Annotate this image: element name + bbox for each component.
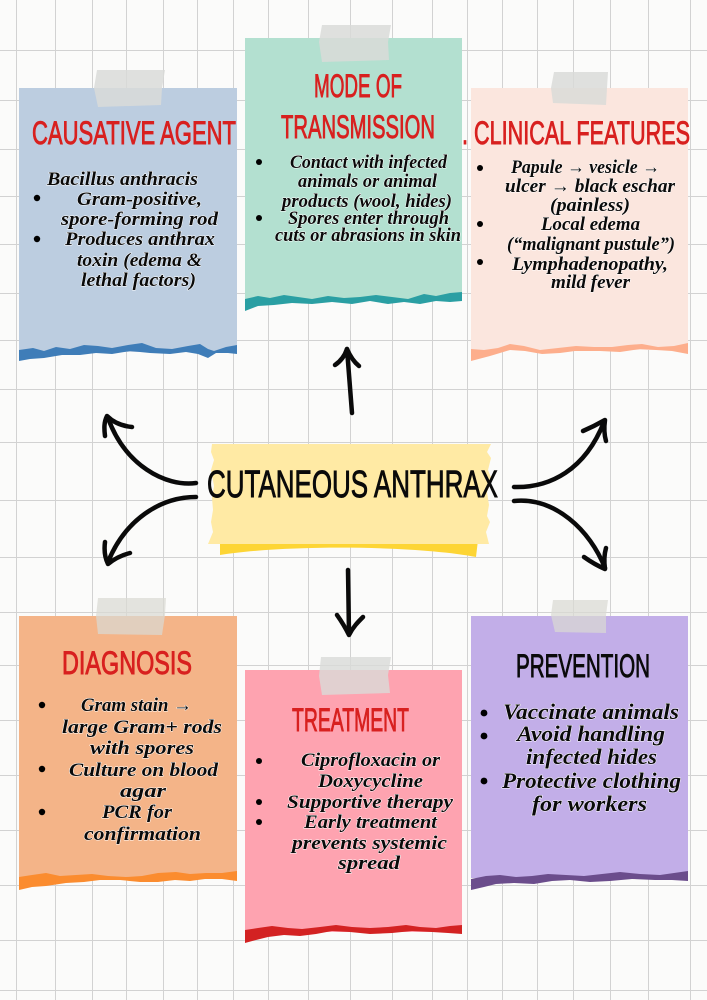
- text block: Papule → vesicle →: [510, 157, 660, 178]
- center title banner: [207, 444, 498, 557]
- panel: clinical features: [462, 72, 690, 361]
- text block: Protective clothing: [501, 768, 681, 793]
- text block: prevents systemic: [290, 833, 448, 854]
- text block: confirmation: [84, 824, 201, 845]
- text block: toxin (edema &: [77, 250, 202, 271]
- arrow: to treatment: [337, 570, 363, 635]
- panel: mode of transmission: [245, 25, 462, 311]
- text block: Local edema: [540, 214, 640, 235]
- text block: Gram-positive,: [77, 189, 202, 210]
- tape: [94, 70, 165, 107]
- text block: PCR for: [101, 802, 173, 823]
- text block: cuts or abrasions in skin: [275, 225, 461, 246]
- title: CUTANEOUS ANTHRAX: [207, 464, 498, 506]
- text block: [34, 169, 219, 291]
- text block: spread: [337, 853, 401, 874]
- text block: (painless): [550, 195, 630, 216]
- tape: [551, 600, 608, 633]
- text block: Gram stain →: [81, 695, 192, 716]
- panel: prevention: [471, 600, 688, 890]
- heading: CAUSATIVE AGENT: [32, 115, 236, 151]
- text block: infected hides: [526, 744, 657, 769]
- text block: [39, 695, 222, 845]
- text block: with spores: [90, 738, 194, 759]
- heading: TREATMENT: [292, 702, 409, 738]
- text block: Vaccinate animals: [503, 699, 679, 724]
- text block: products (wool, hides): [280, 191, 452, 212]
- text block: Culture on blood: [69, 760, 219, 781]
- text block: Doxycycline: [317, 771, 424, 792]
- text block: [256, 750, 454, 874]
- text block: [256, 152, 461, 246]
- arrow: to prevention: [514, 501, 606, 569]
- panel: causative agent: [19, 70, 237, 361]
- arrow: to diagnosis: [105, 497, 196, 564]
- text block: Avoid handling: [515, 721, 665, 746]
- heading: MODE OF: [314, 68, 402, 104]
- text block: lethal factors): [81, 270, 196, 291]
- text block: ulcer → black eschar: [505, 176, 676, 197]
- heading line 2: TRANSMISSION: [281, 109, 435, 145]
- text block: spore-forming rod: [60, 209, 219, 230]
- arrow: to mode of transmission: [335, 349, 359, 413]
- text block: Contact with infected: [290, 152, 447, 173]
- arrow: to clinical features: [514, 420, 606, 487]
- arrow: to causative agent: [104, 416, 196, 483]
- tape: [319, 657, 391, 695]
- text block: large Gram+ rods: [62, 717, 222, 738]
- text block: Spores enter through: [288, 208, 449, 229]
- panel: diagnosis: [19, 598, 237, 890]
- text block: Ciprofloxacin or: [301, 750, 441, 771]
- tape: [96, 598, 166, 635]
- panel: treatment: [245, 657, 462, 943]
- text block: animals or animal: [298, 171, 438, 192]
- text block: [477, 157, 676, 293]
- text block: Produces anthrax: [64, 229, 216, 250]
- text block: Early treatment: [303, 812, 438, 833]
- text block: (“malignant pustule”): [507, 234, 675, 255]
- text block: for workers: [532, 791, 647, 816]
- tape: [319, 25, 391, 62]
- text block: mild fever: [551, 272, 631, 293]
- heading: DIAGNOSIS: [62, 645, 192, 681]
- text block: Bacillus anthracis: [46, 169, 198, 190]
- text block: [481, 699, 681, 816]
- text block: Lymphadenopathy,: [511, 254, 668, 275]
- text block: agar: [120, 781, 167, 802]
- tape: [551, 72, 608, 105]
- text block: Supportive therapy: [287, 792, 454, 813]
